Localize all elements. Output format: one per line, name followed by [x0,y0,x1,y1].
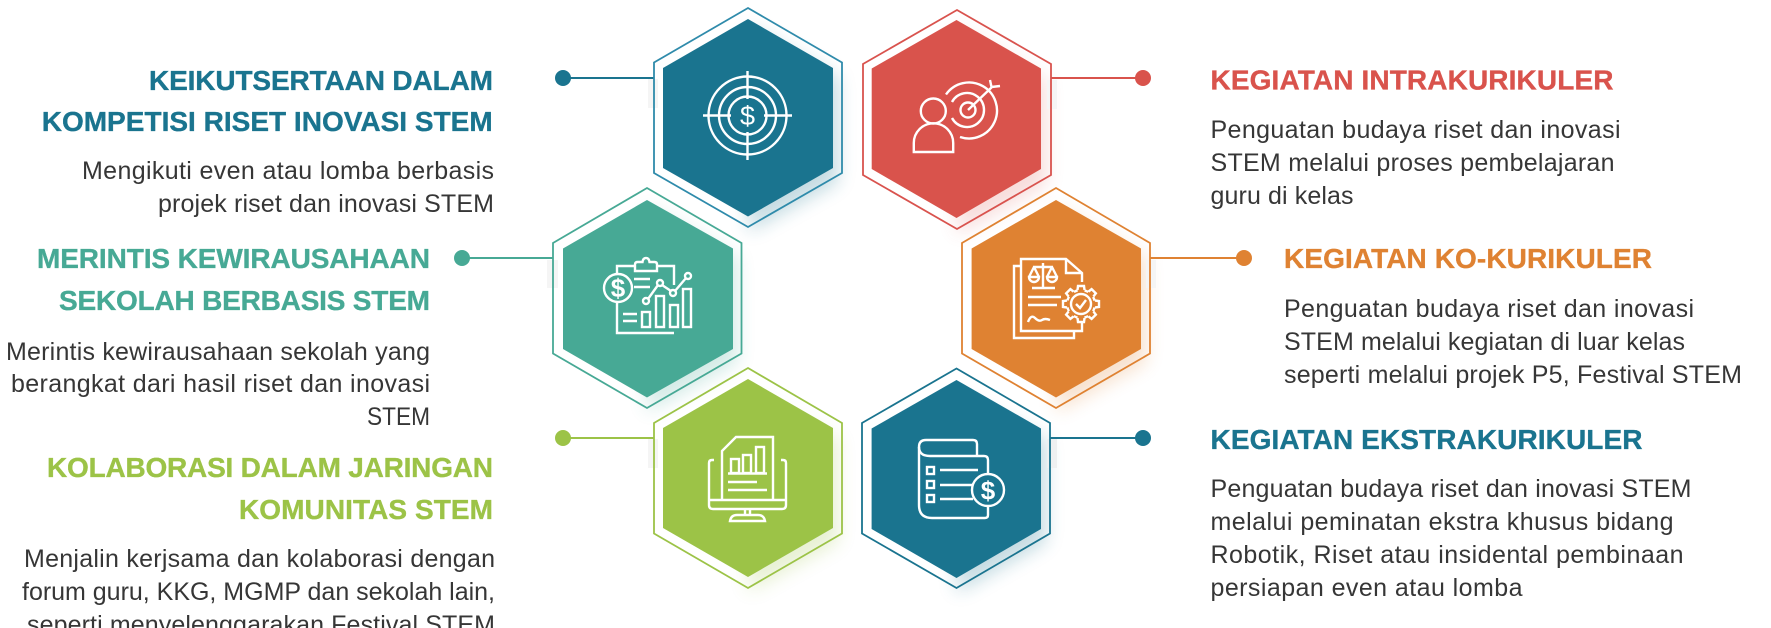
text block: kolaborasi jaringan: KOLABORASI DALAM JARINGAN [47,452,493,483]
panel: intrakurikuler hexagon [863,10,1151,234]
panel: ko-kurikuler hexagon [962,188,1252,412]
text block: kolaborasi jaringan: Menjalin kerjsama dan kolaborasi dengan [24,545,495,573]
text block: kompetisi riset inovasi [42,65,494,218]
connector: ko-kurikuler [1150,250,1252,266]
icon: dollar target [703,71,792,160]
text block: kompetisi riset inovasi: KEIKUTSERTAAN DALAM [149,65,493,96]
icon: checklist with dollar [919,440,1004,518]
icon: dollar target: $ [740,101,755,131]
text block: kolaborasi jaringan [22,452,495,628]
icon: clipboard chart [604,258,691,333]
text block: merintis kewirausahaan: Merintis kewirausahaan sekolah yang [6,338,430,366]
text block: kegiatan ekstrakurikuler: melalui peminatan ekstra khusus bidang [1210,508,1674,536]
connector: kewirausahaan [454,250,553,266]
text block: kegiatan intrakurikuler: STEM melalui proses pembelajaran [1210,149,1614,177]
text block: kegiatan ko-kurikuler: seperti melalui projek P5, Festival STEM [1284,361,1742,389]
text block: merintis kewirausahaan: berangkat dari hasil riset dan inovasi [11,370,430,398]
icon: clipboard chart: $ [611,273,626,303]
icon: checklist with dollar: $ [981,476,996,506]
text block: kegiatan ekstrakurikuler: Penguatan budaya riset dan inovasi STEM [1210,475,1692,503]
text block: kegiatan intrakurikuler: guru di kelas [1210,182,1354,210]
text block: kompetisi riset inovasi: Mengikuti even atau lomba berbasis [82,157,494,185]
connector: kompetisi [555,70,654,86]
text block: kegiatan intrakurikuler: Penguatan budaya riset dan inovasi [1210,116,1620,144]
panel: kompetisi riset hexagon [555,8,842,232]
text block: kegiatan ko-kurikuler: Penguatan budaya riset dan inovasi [1284,295,1694,323]
panel: kolaborasi hexagon [555,368,842,592]
text block: kegiatan ko-kurikuler: STEM melalui kegiatan di luar kelas [1284,328,1685,356]
text block: kegiatan ko-kurikuler: KEGIATAN KO-KURIKULER [1284,243,1652,274]
text block: merintis kewirausahaan [6,243,430,431]
text block: kompetisi riset inovasi: projek riset dan inovasi STEM [158,190,494,218]
text block: kegiatan ekstrakurikuler: Robotik, Riset atau insidental pembinaan [1210,541,1684,569]
icon: monitor with report [709,437,786,521]
text block: kegiatan ekstrakurikuler: KEGIATAN EKSTRAKURIKULER [1210,424,1642,455]
icon: person and target [914,80,1000,152]
text block: kegiatan intrakurikuler [1210,64,1620,210]
text block: kolaborasi jaringan: KOMUNITAS STEM [239,494,493,525]
text block: merintis kewirausahaan: MERINTIS KEWIRAUSAHAAN [37,243,430,274]
connector: kolaborasi [555,430,654,446]
text block: merintis kewirausahaan: SEKOLAH BERBASIS STEM [59,285,430,316]
text block: kegiatan ko-kurikuler [1284,243,1742,389]
connector: ekstrakurikuler [1050,430,1151,446]
panel: kewirausahaan hexagon [454,188,742,412]
text block: kegiatan ekstrakurikuler: persiapan even atau lomba [1210,574,1523,602]
text block: kegiatan ekstrakurikuler [1210,424,1692,602]
panel: ekstrakurikuler hexagon [862,368,1151,593]
text block: kegiatan intrakurikuler: KEGIATAN INTRAKURIKULER [1210,64,1614,96]
text block: kompetisi riset inovasi: KOMPETISI RISET INOVASI STEM [42,106,493,137]
text block: merintis kewirausahaan: STEM [367,403,430,431]
icon: legal document and gear [1014,259,1099,338]
text block: kolaborasi jaringan: forum guru, KKG, MGMP dan sekolah lain, [22,578,495,606]
connector: intrakurikuler [1051,70,1151,86]
